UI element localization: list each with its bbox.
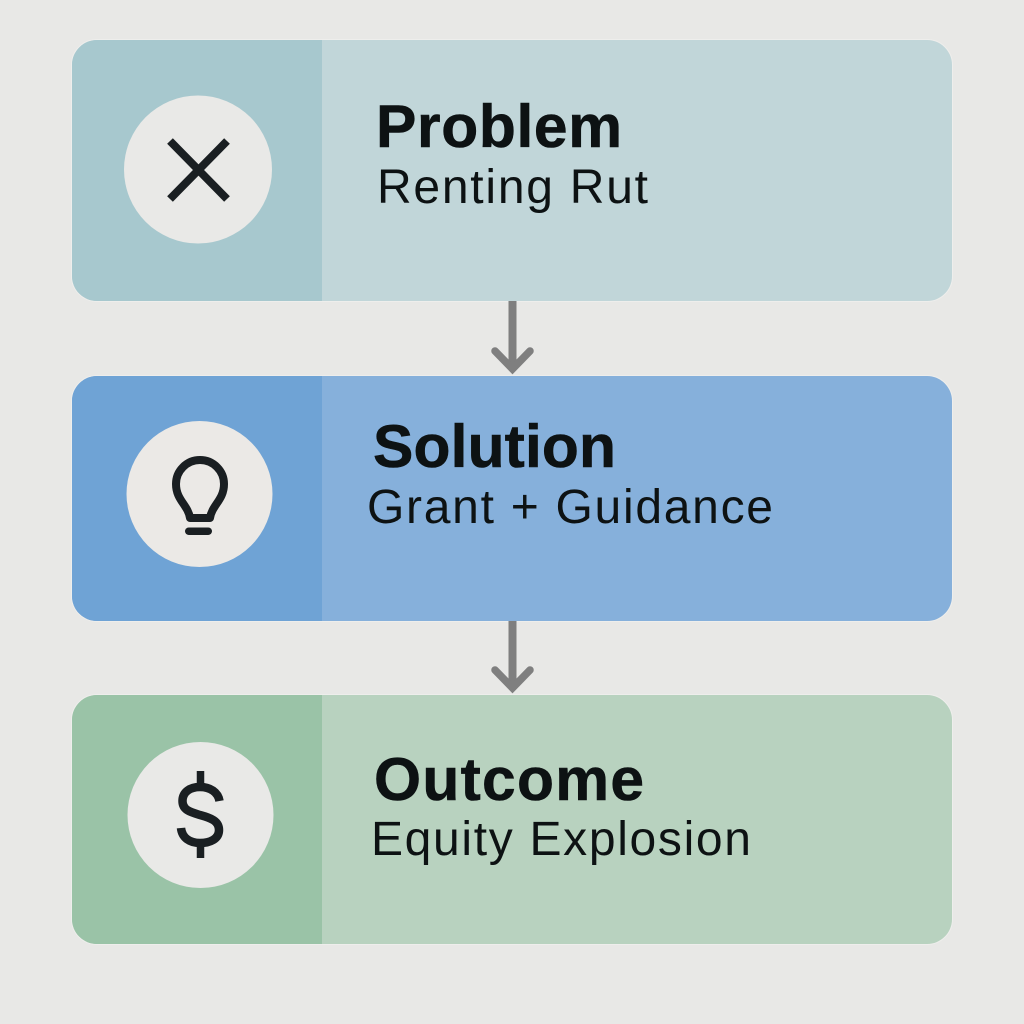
heading: outcome: Outcome	[374, 745, 644, 813]
arrow: solution to outcome	[495, 621, 530, 688]
panel: solution	[72, 376, 952, 622]
icon band: outcome	[72, 695, 322, 944]
icon band: problem	[72, 40, 322, 301]
icon: x mark	[124, 96, 272, 244]
heading: problem: Problem	[376, 92, 622, 160]
panel: outcome	[72, 694, 952, 944]
icon band: solution	[72, 376, 322, 621]
icon: light bulb	[126, 421, 272, 567]
text: renting rut: Renting Rut	[377, 161, 648, 214]
panel: problem	[72, 40, 952, 302]
heading: solution: Solution	[373, 412, 616, 480]
icon: dollar sign	[128, 742, 274, 888]
text: grant + guidance: Grant + Guidance	[367, 481, 773, 534]
arrow: problem to solution	[495, 301, 530, 369]
text: equity explosion: Equity Explosion	[371, 813, 751, 866]
